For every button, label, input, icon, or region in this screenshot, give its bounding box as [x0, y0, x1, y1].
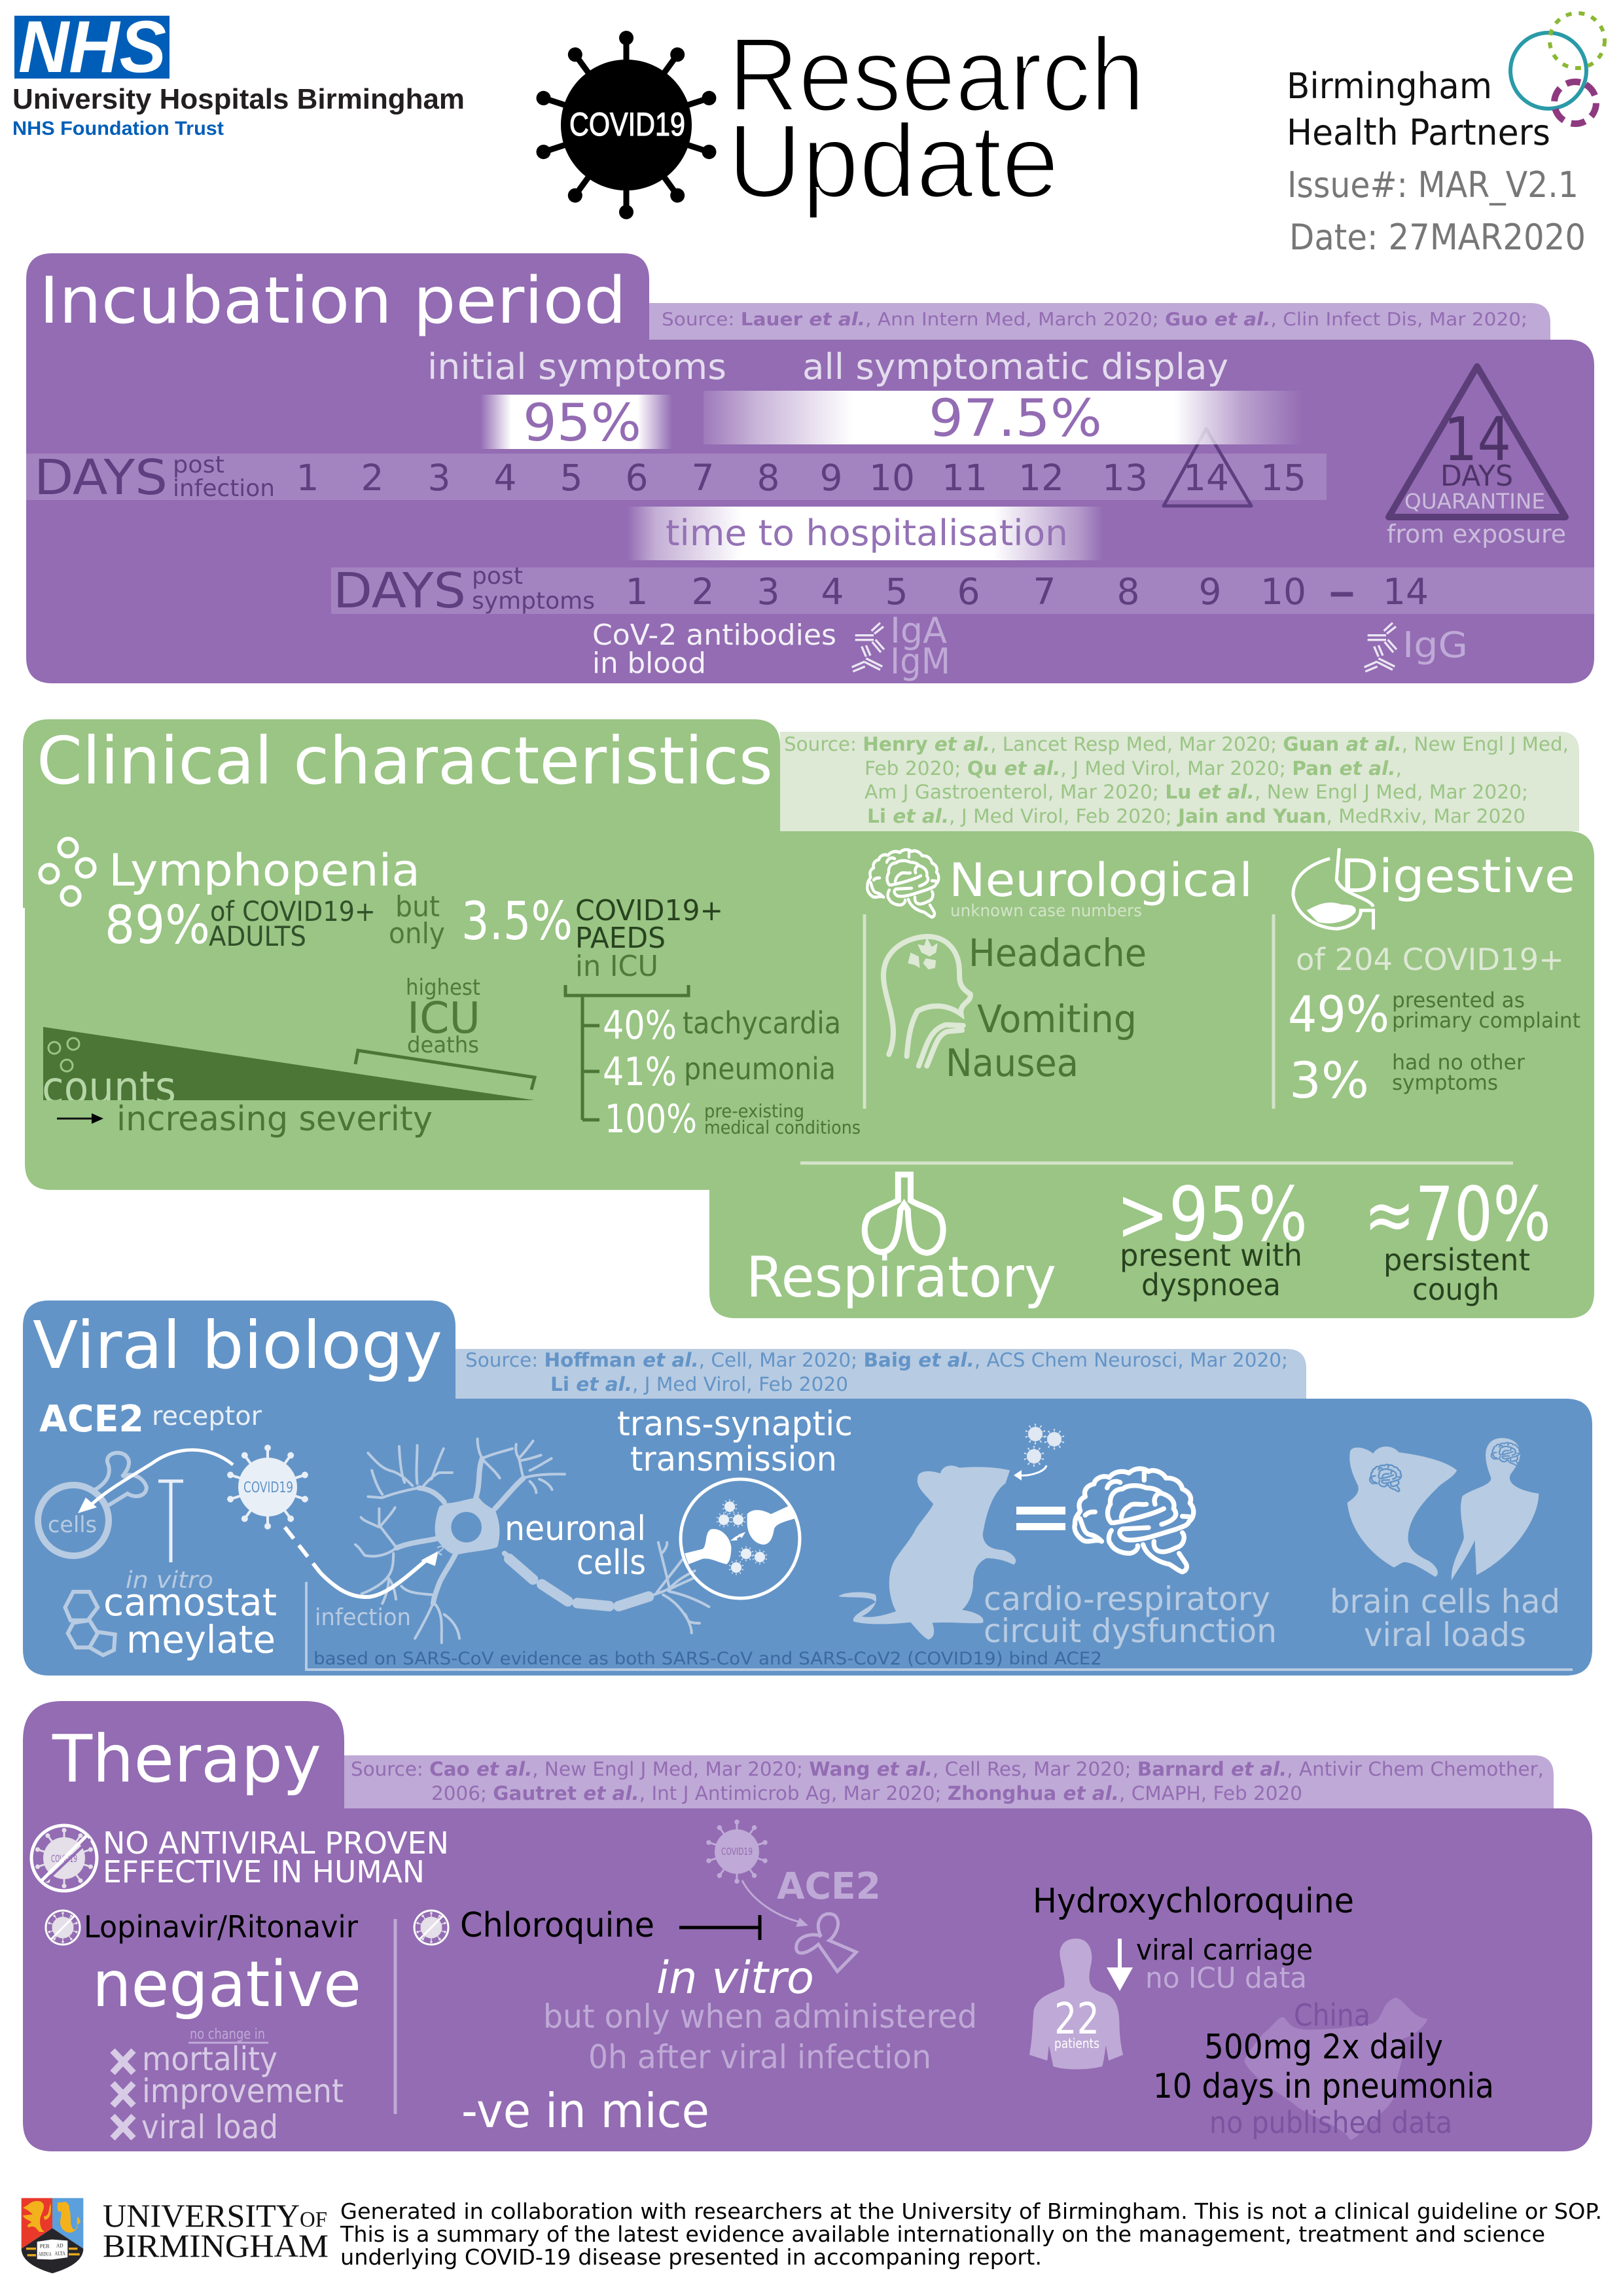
logo: University of Birmingham wordmark: BIRMINGHAM: [103, 2227, 329, 2264]
label: in vitro camostat meylate: meylate: [126, 1617, 276, 1662]
label: time to hospitalisation: [627, 507, 1103, 560]
list: no change in outcomes: viral load: [141, 2108, 278, 2146]
statistic: 89% of adults: of COVID19+: [210, 895, 376, 927]
statistics: digestive: had no other: [1392, 1050, 1525, 1075]
tree diagram: ICU comorbidities: 100%: [605, 1096, 697, 1142]
source citation: [351, 1758, 1544, 1804]
timeline: days post infection: 14: [1183, 457, 1229, 499]
timeline: days post symptoms: 9: [1199, 571, 1221, 613]
statistics: digestive: primary complaint: [1392, 1008, 1580, 1033]
logo: University of Birmingham crest: PER: [40, 2243, 50, 2249]
text: China dosing: no published data: [1209, 2105, 1452, 2140]
header: NHS logo: [12, 6, 465, 139]
text: in vitro finding: -ve in mice: [461, 2083, 709, 2138]
icon: IgA and IgM antibodies: IgM: [890, 641, 950, 682]
text: China dosing: 500mg 2x daily: [1204, 2028, 1443, 2067]
header: COVID19 virus icon: COVID19: [569, 106, 685, 143]
icon: COVID19 virus: [226, 1444, 309, 1530]
icon: IgG antibody: [1364, 623, 1468, 672]
chart: lymphocyte counts wedge: counts: [42, 1062, 176, 1114]
heading: no antiviral proven: EFFECTIVE IN HUMAN: [103, 1854, 425, 1890]
label: in vitro camostat meylate: [103, 1567, 277, 1662]
logo: University of Birmingham crest: AD: [56, 2243, 63, 2249]
source citation: Li et al., J Med Virol, Feb 2020: [550, 1373, 848, 1395]
timeline: days post infection: 11: [942, 457, 988, 499]
icon: lymphocytes: [41, 839, 94, 905]
labels: symptom onset: [427, 346, 1228, 387]
arrow: increasing severity: increasing severity: [116, 1100, 433, 1139]
icon: IgA and IgM antibodies: [852, 610, 950, 682]
statistic: over 95% dyspnoea: >95%: [1116, 1171, 1308, 1258]
callout: 14 days quarantine: [1387, 367, 1566, 548]
label: ACE2 receptor: receptor: [152, 1401, 262, 1431]
heading: therapy: Therapy: [52, 1721, 321, 1797]
diagram: virus binds ACE2: COVID19: [721, 1846, 753, 1857]
label: trans-synaptic transmission: [617, 1405, 853, 1479]
icon: 22 patients: [1029, 1939, 1123, 2070]
statistic: over 95% dyspnoea: [1116, 1171, 1308, 1302]
logo: University of Birmingham crest: [22, 2198, 83, 2273]
chart: lymphocyte counts wedge: [43, 1027, 537, 1100]
timeline: days post symptoms: 7: [1033, 571, 1056, 613]
source citation: Source: Cao et al., New Engl J Med, Mar 2020; Wang et al., Cell Res, Mar 2020; Barnard et al., Antivir Chem Chemother,: [351, 1758, 1544, 1780]
timeline: days post infection: post: [173, 452, 224, 478]
footer: disclaimer: Generated in collaboration with researchers at the University of Birmingham. This is not a clinical guideline or SOP.: [340, 2198, 1602, 2224]
icon: inhibition bar: [679, 1915, 760, 1940]
label: highest ICU deaths: deaths: [407, 1032, 479, 1058]
statistic: over 95% dyspnoea: present with: [1120, 1238, 1302, 1273]
label: infection: infection: [315, 1604, 411, 1631]
timeline: days post infection: 4: [493, 457, 517, 499]
logo: Birmingham Health Partners and issue details: Birmingham: [1287, 65, 1492, 107]
text: in vitro finding: in vitro: [656, 1952, 814, 2004]
label: highest ICU deaths: ICU: [407, 993, 480, 1043]
icon: IgA and IgM antibodies: IgA: [890, 610, 947, 651]
timeline: days post symptoms: post: [472, 563, 523, 590]
header: NHS logo: NHS Foundation Trust: [12, 118, 224, 139]
icon: molecule: [65, 1592, 115, 1655]
heading: viral biology: Viral biology: [33, 1307, 442, 1384]
label: cardio-respiratory circuit dysfunction: cardio-respiratory: [984, 1580, 1270, 1618]
footer: disclaimer: [340, 2198, 1602, 2270]
label: time to hospitalisation: time to hospitalisation: [666, 512, 1068, 554]
timeline: days post symptoms: 14: [1383, 571, 1429, 613]
timeline: days post symptoms: 1: [626, 571, 648, 613]
tree diagram: ICU comorbidities: pneumonia: [684, 1051, 836, 1086]
icon: inhibition bar: [158, 1481, 183, 1562]
icon: crossed-out virus small: [414, 1910, 448, 1945]
logo: University of Birmingham crest: ALTA: [54, 2251, 65, 2257]
icon: lungs: [865, 1175, 943, 1253]
statistic: 3.5% of paediatric cases: PAEDS: [575, 922, 666, 955]
text: in vitro finding: 0h after viral infection: [588, 2038, 931, 2076]
title: Research Update: [728, 16, 1145, 219]
panel: clinical characteristics: [23, 719, 1594, 1318]
label: in vitro camostat meylate: camostat: [103, 1580, 277, 1624]
statistic: 97.5%: 97.5%: [929, 389, 1102, 448]
timeline: days post infection: 1: [296, 457, 319, 499]
icon: 22 patients: 22: [1054, 1994, 1099, 2044]
icon: crossed-out virus small: [46, 1910, 80, 1945]
icon: cell with ACE2 receptor: cells: [48, 1512, 97, 1538]
heading: neurological: unknown case numbers: [950, 901, 1142, 921]
timeline: days post symptoms: 8: [1116, 571, 1140, 613]
statistic: about 70% cough: cough: [1412, 1272, 1499, 1307]
statistic: 3.5% of paediatric cases: COVID19+: [575, 894, 723, 927]
heading: no antiviral proven: NO ANTIVIRAL PROVEN: [103, 1825, 449, 1861]
source citation: 2006; Gautret et al., Int J Antimicrob Ag, Mar 2020; Zhonghua et al., CMAPH, Feb 2020: [431, 1782, 1302, 1804]
heading: lymphopenia: Lymphopenia: [109, 845, 420, 897]
statistic: 3.5% of paediatric cases: 3.5%: [461, 891, 573, 952]
list: no change in outcomes: improvement: [142, 2072, 344, 2110]
timeline: days post infection: 2: [361, 457, 383, 499]
heading: chloroquine: Chloroquine: [460, 1906, 654, 1945]
icon: crossed-out virus: COVID19: [51, 1853, 77, 1865]
labels: neurological symptoms: [946, 931, 1147, 1085]
statistic: about 70% cough: ≈70%: [1364, 1171, 1551, 1258]
labels: neurological symptoms: Nausea: [946, 1041, 1079, 1085]
result: negative: negative: [92, 1948, 361, 2021]
label: highest ICU deaths: highest: [406, 975, 480, 1001]
label: brain cells had viral loads: viral loads: [1364, 1616, 1526, 1654]
statistic: 89% of adults: ADULTS: [209, 920, 306, 952]
logo: University of Birmingham wordmark: UNIVERSITY: [103, 2197, 300, 2234]
label: brain cells had viral loads: [1330, 1583, 1560, 1654]
label: brain cells had viral loads: brain cells had: [1330, 1583, 1560, 1621]
statistic: about 70% cough: persistent: [1383, 1242, 1530, 1278]
text: in vitro finding: [461, 1952, 977, 2138]
statistic: 97.5%: [704, 389, 1304, 448]
tree diagram: ICU comorbidities: tachycardia: [683, 1005, 841, 1041]
header: NHS logo: University Hospitals Birmingham: [12, 83, 465, 115]
arrow: reduced viral carriage: [1107, 1939, 1133, 1991]
logo: University of Birmingham crest: ARDUA: [39, 2251, 52, 2257]
footer: disclaimer: This is a summary of the latest evidence available internationally on the management, treatment and science: [340, 2221, 1545, 2247]
timeline: days post infection: [26, 450, 1327, 506]
logo: Birmingham Health Partners and issue details: [1287, 13, 1605, 258]
label: ACE2 receptor: ACE2: [39, 1398, 144, 1441]
list: no change in outcomes: [113, 2026, 344, 2146]
icon: mouse inhaling virus: [838, 1424, 1064, 1640]
timeline: days post infection: 3: [428, 457, 450, 499]
icon: brain: [867, 850, 938, 917]
timeline: days post symptoms: 6: [957, 571, 980, 613]
statistic: over 95% dyspnoea: dyspnoea: [1141, 1267, 1281, 1302]
label: cardio-respiratory circuit dysfunction: [984, 1580, 1277, 1650]
label: neuronal cells: cells: [577, 1543, 646, 1583]
icon: equals sign: [1016, 1507, 1065, 1530]
source citation: Source: Lauer et al., Ann Intern Med, March 2020; Guo et al., Clin Infect Dis, Mar 2020;: [662, 308, 1527, 330]
icon: neuron: [355, 1439, 709, 1643]
diagram: virus binds ACE2: [705, 1820, 881, 1971]
heading: incubation period: Incubation period: [39, 264, 626, 338]
icon: synapse in circle: [681, 1479, 800, 1598]
timeline: days post infection: DAYS: [34, 450, 168, 506]
text: China dosing: [1153, 1998, 1494, 2140]
labels: symptom onset: all symptomatic display: [802, 346, 1228, 387]
statistics: digestive: [1288, 942, 1580, 1109]
heading: hydroxychloroquine: Hydroxychloroquine: [1033, 1882, 1354, 1921]
statistic: 3.5% of paediatric cases: in ICU: [575, 950, 658, 983]
label: CoV-2 antibodies in blood: in blood: [592, 647, 706, 680]
icon: map of China: [1244, 1998, 1427, 2140]
label: trans-synaptic transmission: transmission: [630, 1440, 837, 1479]
heading: no antiviral proven: [103, 1825, 449, 1890]
logo: Birmingham Health Partners and issue details: Issue#: MAR_V2.1: [1287, 164, 1578, 206]
text: viral carriage: viral carriage: [1136, 1933, 1313, 1967]
panel: therapy: [23, 1701, 1592, 2151]
arrow: infection route: [285, 1527, 443, 1597]
timeline: days post symptoms: –: [1328, 571, 1356, 613]
icon: head with stars: [883, 937, 971, 1066]
source citation: Source: Hoffman et al., Cell, Mar 2020; Baig et al., ACS Chem Neurosci, Mar 2020;: [465, 1349, 1288, 1371]
timeline: days post infection: 15: [1260, 457, 1306, 499]
timeline: days post infection: 10: [869, 457, 915, 499]
logo: University of Birmingham wordmark: [103, 2197, 329, 2264]
source citation: [784, 733, 1569, 827]
panel: incubation period: [26, 253, 1594, 683]
labels: neurological symptoms: Vomiting: [977, 997, 1137, 1041]
title: Research Update: Research: [728, 16, 1145, 133]
tree diagram: ICU comorbidities: [565, 985, 861, 1142]
icon: COVID19 virus: COVID19: [243, 1480, 293, 1496]
text: in vitro finding: but only when administered: [543, 1998, 977, 2036]
text: China dosing: 10 days in pneumonia: [1153, 2067, 1494, 2106]
timeline: days post infection: 5: [560, 457, 582, 499]
panel: viral biology: [23, 1300, 1592, 1676]
arrow: virus binds ACE2: [78, 1450, 233, 1513]
label: ACE2 receptor: [39, 1398, 262, 1441]
timeline: days post symptoms: 2: [691, 571, 715, 613]
diagram: virus binds ACE2: ACE2: [777, 1865, 881, 1908]
timeline: days post symptoms: symptoms: [472, 588, 595, 615]
timeline: days post symptoms: 5: [885, 571, 908, 613]
text: viral carriage: no ICU data: [1145, 1962, 1307, 1995]
list: no change in outcomes: no change in: [190, 2026, 265, 2043]
logo: University of Birmingham wordmark: OF: [300, 2208, 327, 2232]
icon: crossed-out virus: [31, 1825, 97, 1891]
labels: symptom onset: initial symptoms: [427, 346, 726, 387]
icon: triangle marking day 14: [1164, 429, 1251, 506]
statistics: digestive: 49%: [1288, 985, 1389, 1043]
icon: mouse and human silhouettes with brains: [1347, 1438, 1539, 1580]
timeline: days post infection: 9: [819, 457, 843, 499]
footnote: SARS-CoV evidence: based on SARS-CoV evidence as both SARS-CoV and SARS-CoV2 (COVID19) bind ACE2: [313, 1649, 1102, 1669]
timeline: days post infection: 12: [1018, 457, 1064, 499]
label: but only: but: [395, 890, 440, 924]
label: but only: [389, 890, 445, 950]
label: cardio-respiratory circuit dysfunction: circuit dysfunction: [984, 1612, 1277, 1650]
statistics: digestive: presented as: [1392, 988, 1525, 1013]
timeline: days post symptoms: 4: [821, 571, 844, 613]
callout: 14 days quarantine: from exposure: [1387, 520, 1566, 548]
heading: lopinavir/ritonavir: Lopinavir/Ritonavir: [84, 1909, 358, 1945]
tree diagram: ICU comorbidities: medical conditions: [704, 1117, 861, 1138]
heading: digestive: Digestive: [1340, 850, 1575, 903]
text: viral carriage: [1136, 1933, 1313, 1995]
callout: 14 days quarantine: DAYS: [1440, 459, 1513, 493]
timeline: days post infection: 8: [757, 457, 780, 499]
label: but only: only: [389, 917, 445, 950]
source citation: Am J Gastroenterol, Mar 2020; Lu et al., New Engl J Med, Mar 2020;: [865, 781, 1528, 803]
timeline: days post infection: infection: [173, 475, 275, 502]
label: CoV-2 antibodies in blood: CoV-2 antibodies: [592, 619, 836, 652]
timeline: days post symptoms: 3: [757, 571, 780, 613]
title: Research Update: Update: [728, 102, 1059, 219]
tree diagram: ICU comorbidities: pre-existing: [704, 1100, 804, 1122]
label: neuronal cells: neuronal: [505, 1509, 646, 1549]
heading: neurological: Neurological: [949, 853, 1253, 907]
logo: Birmingham Health Partners and issue details: Health Partners: [1287, 112, 1550, 153]
icon: stomach: [1293, 848, 1374, 929]
footer: disclaimer: underlying COVID-19 disease presented in accompaning report.: [340, 2244, 1042, 2270]
heading: clinical characteristics: Clinical characteristics: [37, 723, 773, 799]
callout: 14 days quarantine: QUARANTINE: [1404, 489, 1545, 514]
logo: Birmingham Health Partners and issue details: Date: 27MAR2020: [1289, 217, 1586, 258]
text: China dosing: China: [1294, 1998, 1370, 2033]
statistic: 89% of adults: [105, 895, 376, 956]
icon: brain: [1075, 1469, 1194, 1572]
source citation: [465, 1349, 1288, 1395]
tree diagram: ICU comorbidities: 41%: [603, 1049, 677, 1095]
statistics: digestive: 3%: [1289, 1051, 1369, 1109]
source citation: Source: Henry et al., Lancet Resp Med, Mar 2020; Guan at al., New Engl J Med,: [784, 733, 1569, 755]
timeline: days post infection: 6: [626, 457, 648, 499]
source citation: Li et al., J Med Virol, Feb 2020; Jain and Yuan, MedRxiv, Mar 2020: [867, 805, 1525, 827]
timeline: days post infection: 7: [691, 457, 715, 499]
timeline: days post infection: 13: [1102, 457, 1148, 499]
statistic: 89% of adults: 89%: [105, 895, 210, 956]
statistics: digestive: symptoms: [1392, 1070, 1498, 1095]
timeline: days post symptoms: 10: [1260, 571, 1306, 613]
icon: cell with ACE2 receptor: [38, 1453, 147, 1556]
labels: neurological symptoms: Headache: [969, 931, 1147, 975]
statistics: digestive: of 204 COVID19+: [1296, 942, 1564, 977]
label: highest ICU deaths: [406, 975, 480, 1058]
statistic: 3.5% of paediatric cases: [461, 891, 723, 983]
statistic: 95%: [480, 394, 672, 453]
list: no change in outcomes: mortality: [142, 2040, 277, 2078]
icon: IgG antibody: IgG: [1402, 624, 1468, 666]
statistic: 95%: 95%: [523, 394, 641, 453]
label: neuronal cells: [505, 1509, 646, 1583]
timeline: days post symptoms: [331, 563, 1594, 619]
callout: 14 days quarantine: 14: [1444, 404, 1511, 475]
label: CoV-2 antibodies in blood: [592, 619, 836, 680]
label: trans-synaptic transmission: trans-synaptic: [617, 1405, 853, 1444]
header: COVID19 virus icon: [535, 31, 718, 219]
tree diagram: ICU comorbidities: 40%: [603, 1003, 677, 1049]
source citation: Feb 2020; Qu et al., J Med Virol, Mar 2020; Pan et al.,: [865, 757, 1402, 780]
statistic: about 70% cough: [1364, 1171, 1551, 1307]
timeline: days post symptoms: DAYS: [333, 563, 466, 619]
header: NHS logo: NHS: [18, 6, 166, 88]
label: in vitro camostat meylate: in vitro: [126, 1567, 213, 1594]
heading: respiratory: Respiratory: [746, 1245, 1056, 1310]
icon: 22 patients: patients: [1054, 2036, 1099, 2051]
